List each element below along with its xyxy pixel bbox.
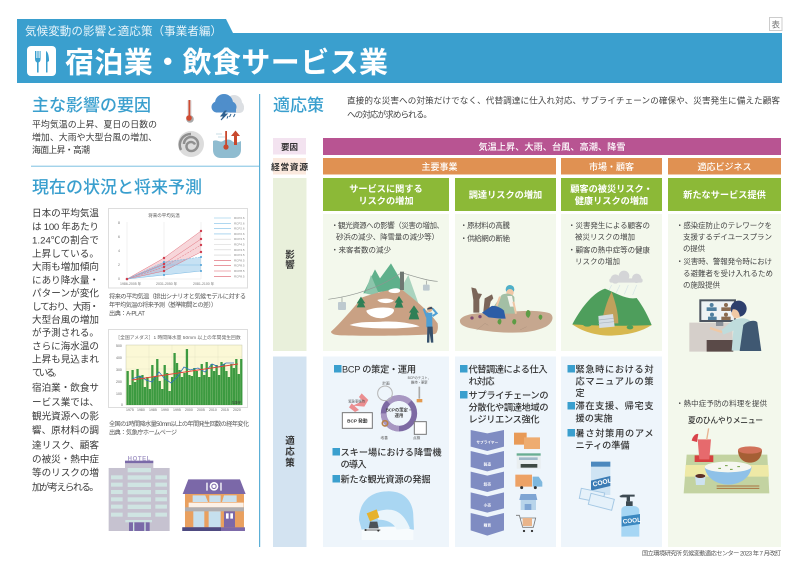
text: procurement risk impact: ・原材料の高騰 — [460, 220, 510, 230]
header: service risk — [323, 178, 449, 211]
text: customer measures: 滞在支援、帰宅支 — [576, 400, 654, 411]
label: adaptation: 策 — [285, 457, 295, 469]
caption: rainfall chart — [109, 420, 249, 436]
chart: projected mean temperature: RCP4.5 — [234, 242, 245, 246]
text: customer measures: 緊急時における対 — [576, 364, 654, 374]
text: procurement measures: レジリエンス強化 — [468, 414, 540, 424]
text: factors: 増加、大雨や大型台風の増加、 — [32, 132, 157, 142]
text: snow and tourism measures: の導入 — [340, 458, 366, 470]
illustration: landslide — [572, 271, 652, 336]
text: status body: 上昇している。 — [32, 249, 99, 260]
chart: projected mean temperature: 0 — [118, 277, 120, 281]
text: factors: 平均気温の上昇、夏日の日数の — [32, 118, 157, 130]
text: service risk impact: ・観光資源への影響（災害の増加、 — [331, 220, 444, 230]
label: management resources — [271, 158, 308, 174]
label: factors — [273, 138, 306, 154]
text: status body: 達リスク、顧客 — [32, 440, 99, 452]
text: status body: しており、大雨・ — [32, 301, 99, 313]
panel: new services (spans impact and adaptation) — [668, 214, 781, 547]
illustration: cooling products — [579, 462, 642, 537]
text: status body: ービス業では、 — [32, 396, 99, 408]
diagram: BCP cycle: 改善 — [381, 435, 388, 440]
panel: service adaptation — [323, 356, 449, 547]
diagram: BCP cycle: 運用 — [395, 412, 403, 419]
bar: main business: 主要事業 — [421, 161, 458, 172]
text: customer measures: ニティの準備 — [576, 440, 630, 450]
chart: heavy rainfall frequency — [108, 330, 248, 412]
diagram: supply chain: 購買 — [484, 522, 491, 527]
header: service risk: サービスに関する — [349, 183, 423, 194]
illustration: restaurant — [182, 479, 246, 531]
caption: temperature chart: 年平均気温の将来予測（基準期間との差）） — [109, 301, 217, 309]
text: snow and tourism measures: 新たな観光資源の発掘 — [340, 474, 430, 484]
diagram: BCP cycle: 計画 — [382, 380, 390, 385]
caption: rainfall chart: 全国の1時間降水量50mm以上の年間発生回数の経年変化 — [109, 420, 249, 428]
header: procurement risk — [455, 178, 556, 211]
chart: projected mean temperature: RCP4.5 — [234, 253, 245, 257]
chart: projected mean temperature: 2031-2050 年 — [156, 281, 178, 286]
text: customer measures: 暑さ対策用のアメ — [576, 428, 654, 438]
text: procurement measures: 代替調達による仕入 — [468, 364, 548, 374]
text: status body: パターンが変化 — [32, 288, 99, 300]
header: customer risk: 顧客の被災リスク・ — [570, 183, 653, 194]
header: new services: 新たなサービス提供 — [683, 189, 766, 200]
chart: projected mean temperature: RCP2.6 — [234, 232, 245, 236]
panel: current status and projection — [32, 178, 249, 531]
chart: heavy rainfall frequency: 100 — [116, 392, 122, 396]
chart: projected mean temperature: RCP2.6 — [234, 221, 245, 225]
panel: customer risk impact — [561, 214, 662, 351]
icon: shopping cart — [516, 515, 536, 532]
text: status body: ている。 — [32, 368, 62, 379]
diagram: BCP cycle: BCPのテスト、 — [408, 375, 431, 380]
text: procurement risk impact — [460, 220, 510, 243]
chart: heavy rainfall frequency: 1995 — [173, 408, 181, 412]
heading: status: 現在の状況と将来予測 — [32, 178, 202, 197]
diagram: BCP cycle: BCPの策定・ — [386, 407, 412, 414]
panel: adaptation intro — [273, 94, 780, 120]
text: status body: は 100 年あたり — [32, 221, 99, 233]
label: adaptation — [273, 356, 306, 547]
label: impact — [273, 178, 306, 351]
icon: truck — [515, 475, 542, 489]
text: procurement measures: サプライチェーンの — [468, 390, 548, 400]
bar: climate factors: 気温上昇、大雨、台風、高潮、降雪 — [478, 141, 626, 152]
chart: projected mean temperature: 将来の平均気温 — [148, 212, 180, 219]
chart: projected mean temperature: 8 — [118, 221, 120, 225]
panel: service risk impact — [323, 214, 449, 351]
bar: market and customers — [561, 158, 662, 174]
diagram: supply chain: 小売 — [484, 502, 491, 507]
diagram: supply chain: 製造 — [484, 461, 491, 466]
label: adaptation: 適 — [285, 435, 295, 447]
chart: projected mean temperature: 2 — [118, 263, 120, 267]
page tag: 表 — [771, 20, 780, 30]
chart: heavy rainfall frequency: 500 — [116, 344, 122, 348]
text: customer measures: 援の実施 — [576, 412, 612, 424]
illustration: video conference at desk — [689, 299, 761, 352]
chart: heavy rainfall frequency: 気象庁 — [232, 400, 241, 404]
text: status body: さらに海水温の — [32, 340, 99, 352]
text: new services impact: の施設提供 — [683, 280, 720, 290]
diagram: supply chain: サプライヤー — [476, 439, 499, 444]
chart: heavy rainfall frequency: 2020 — [233, 408, 241, 412]
bar: adaptation business — [668, 158, 781, 174]
diagram: BCP cycle: 緊急事態時 — [348, 398, 366, 403]
text: status body: の被災・熱中症 — [32, 454, 99, 466]
header: service risk: リスクの増加 — [358, 195, 414, 206]
text: status body: 観光資源への影 — [32, 410, 99, 422]
caption: rainfall chart: 出典：気象庁ホームページ — [109, 428, 177, 436]
text: factors — [32, 118, 157, 155]
text: status body: 上昇も見込まれ — [32, 354, 99, 366]
chart: projected mean temperature: 1986-2005 年 — [120, 281, 142, 286]
text: status body: 等のリスクの増 — [32, 467, 99, 479]
header subtitle: 気候変動の影響と適応策（事業者編） — [25, 24, 222, 38]
chart: heavy rainfall frequency: 300 — [116, 368, 122, 372]
text: status body: 日本の平均気温 — [32, 208, 99, 220]
diagram: supply chain: 卸売 — [484, 482, 491, 487]
text: adaptation intro — [347, 94, 780, 120]
text: customer risk impact: ・災害発生による顧客の — [568, 220, 650, 230]
illustration: hotel — [109, 456, 170, 531]
text: customer risk impact — [568, 220, 650, 266]
heading: adaptation: 適応策 — [273, 96, 324, 115]
caption: temperature chart: 将来の平均気温（排出シナリオと気候モデルに対する — [109, 292, 246, 300]
diagram: BCP cycle: 維持・更新 — [411, 379, 428, 384]
text: status body: 1.24℃の割合で — [32, 234, 99, 246]
text: adaptation intro: への対応が求められる。 — [347, 108, 432, 120]
text: new services impact: ・感染症防止のテレワークを — [676, 220, 772, 230]
illustration: ski slope with little snow — [328, 263, 438, 343]
chart: heavy rainfall frequency: 1980 — [137, 408, 145, 412]
text: procurement measures — [460, 364, 548, 424]
chart: projected mean temperature: 6 — [118, 235, 120, 239]
label: impact: 響 — [285, 259, 295, 271]
text: procurement risk impact: ・供給網の断絶 — [460, 233, 510, 243]
chart: projected mean temperature: RCP8.5 — [234, 269, 245, 273]
text: snow and tourism measures — [332, 446, 442, 484]
bar: market and customers: 市場・顧客 — [589, 161, 634, 172]
text: snow and tourism measures: スキー場における降雪機 — [340, 446, 442, 458]
chart: projected mean temperature: RCP2.6 — [234, 227, 245, 231]
text: heatstroke menu — [676, 398, 768, 425]
text: heatstroke menu: ・熱中症予防の料理を提供 — [676, 398, 768, 408]
main title: 宿泊業・飲食サービス業 — [65, 46, 388, 80]
panel: procurement risk impact — [455, 214, 556, 351]
bar: main business — [323, 158, 556, 174]
diagram: BCP cycle — [342, 375, 431, 440]
heading: factors: 主な影響の要因 — [32, 96, 151, 115]
chart: projected mean temperature: RCP4.5 — [234, 248, 245, 252]
text: status body: 大雨も増加傾向 — [32, 261, 99, 273]
illustration: cooling products: COOL — [622, 517, 642, 526]
chart: projected mean temperature — [108, 208, 248, 288]
text: BCP heading: BCP の策定・運用 — [342, 364, 416, 374]
icon: shop — [519, 494, 537, 510]
text: new services impact: の提供 — [683, 243, 706, 253]
chart: heavy rainfall frequency: 1990 — [161, 408, 169, 412]
row labels — [271, 138, 308, 547]
text: service risk impact — [331, 220, 444, 254]
chart: projected mean temperature: 4 — [118, 249, 120, 253]
icon: sea level rise — [213, 130, 241, 158]
text: customer measures: 応マニュアルの策 — [576, 376, 654, 386]
text: new services impact: る避難者を受け入れるため — [683, 268, 773, 278]
chart: projected mean temperature: RCP4.5 — [234, 237, 245, 241]
chart: heavy rainfall frequency: 2005 — [197, 408, 205, 412]
panel: procurement adaptation — [455, 356, 556, 547]
chart: projected mean temperature: 2081-2100 年 — [193, 281, 215, 286]
icon: boxes — [514, 433, 540, 449]
header: new services — [668, 178, 781, 211]
text: service risk impact: ・来客者数の減少 — [331, 244, 392, 254]
diagram: BCP cycle: 点検 — [413, 435, 421, 440]
header banner — [17, 19, 782, 83]
header: procurement risk: 調達リスクの増加 — [469, 189, 542, 200]
chart: heavy rainfall frequency: 2000 — [185, 408, 193, 412]
text: customer risk impact: ・顧客の熱中症等の健康 — [568, 244, 650, 254]
text: status body — [32, 208, 99, 494]
caption: temperature chart: 出典：A-PLAT — [109, 310, 145, 318]
illustration: cooling products: COOL — [592, 477, 613, 489]
text: status body: 大型台風の増加 — [32, 314, 99, 326]
text: factors: 海面上昇・高潮 — [32, 144, 90, 155]
chart: projected mean temperature: RCP8.5 — [234, 258, 245, 262]
chart: heavy rainfall frequency: ［全国アメダス］1 時間降水量 50mm 以上の年間発生回数 — [115, 334, 241, 341]
illustration: hotel: HOTEL — [128, 456, 151, 462]
illustration: snow machine — [359, 491, 414, 540]
panel: main impact factors — [32, 94, 244, 158]
text: procurement measures: 分散化や調達地域の — [468, 402, 548, 412]
label: factors: 要因 — [281, 142, 298, 152]
icon: fork and knife — [27, 46, 56, 76]
panel: customer adaptation — [561, 356, 662, 547]
chart: heavy rainfall frequency: 1975 — [126, 408, 134, 412]
chart: projected mean temperature: RCP8.5 — [234, 274, 245, 278]
chart: heavy rainfall frequency: 2010 — [209, 408, 217, 412]
chart: heavy rainfall frequency: 0 — [121, 403, 123, 407]
label: adaptation: 応 — [285, 447, 295, 458]
text: new services impact — [676, 220, 773, 290]
text: customer measures: 定 — [576, 388, 585, 398]
text: new services impact: 支援するデイユースプラン — [683, 232, 772, 242]
page tag — [770, 18, 782, 30]
chart: projected mean temperature: RCP8.5 — [234, 264, 245, 268]
diagram: BCP cycle: BCP 発動 — [347, 417, 368, 424]
icon: thermometer — [186, 100, 194, 123]
footer credit: 国立環境研究所 気候変動適応センター 2023 年 7 月改訂 — [642, 550, 781, 558]
illustration: farmer in damaged field — [460, 285, 553, 333]
bar: adaptation business: 適応ビジネス — [697, 161, 752, 172]
bar: climate factors — [323, 138, 781, 155]
header: customer risk — [561, 178, 662, 211]
text: procurement measures: れ対応 — [468, 376, 494, 386]
icon: rain cloud — [212, 94, 244, 120]
icon: typhoon — [178, 131, 204, 157]
text: status body: 加が考えられる。 — [32, 482, 99, 494]
text: customer measures — [568, 364, 654, 450]
text: heatstroke menu: 夏のひんやりメニュー — [688, 416, 763, 425]
label: impact: 影 — [285, 249, 295, 261]
text: customer risk impact: 被災リスクの増加 — [575, 232, 635, 242]
chart: heavy rainfall frequency: 1985 — [149, 408, 157, 412]
illustration: summer meal — [684, 428, 769, 493]
text: new services impact: ・災害時、警報発令時におけ — [676, 256, 772, 266]
text: status body: 宿泊業・飲食サ — [32, 382, 99, 394]
header: customer risk: 健康リスクの増加 — [575, 195, 648, 206]
text: status body: が予測される。 — [32, 327, 99, 339]
text: service risk impact: 砂浜の減少、降雪量の減少等） — [336, 232, 439, 242]
text: status body: 響、原材料の調 — [32, 424, 99, 436]
caption: temperature chart — [109, 292, 246, 318]
text: customer risk impact: リスクの増加 — [575, 256, 620, 266]
chart: heavy rainfall frequency: 200 — [116, 380, 122, 384]
chart: heavy rainfall frequency: 2015 — [221, 408, 229, 412]
chart: projected mean temperature: RCP2.6 — [234, 216, 245, 220]
diagram: supply chain — [471, 430, 542, 536]
text: adaptation intro: 直接的な災害への対策だけでなく、代替調達に仕入れ対応、サプライチェーンの確保や、災害発生に備えた顧客 — [347, 94, 780, 106]
chart: heavy rainfall frequency: 400 — [116, 356, 122, 360]
label: management resources: 経営資源 — [271, 161, 308, 172]
text: status body: にあり降水量・ — [32, 274, 99, 286]
icon: factory — [517, 453, 541, 469]
